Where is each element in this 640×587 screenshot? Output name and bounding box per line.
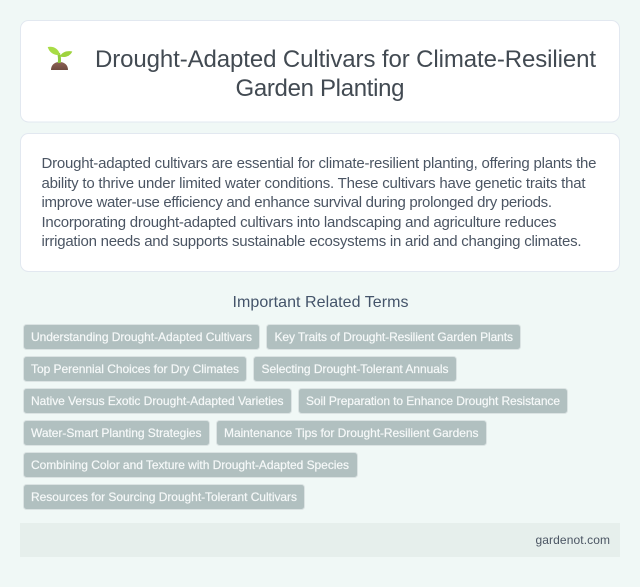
- header panel: [20, 20, 620, 122]
- tag: water-smart: Water-Smart Planting Strategies: [31, 426, 202, 440]
- title: [95, 46, 596, 102]
- icon: seedling: [48, 47, 72, 70]
- description text: [42, 155, 596, 250]
- tag: annuals: [254, 356, 456, 382]
- tag: native versus exotic: [24, 388, 292, 414]
- tag: understanding: [24, 324, 260, 350]
- tag: perennial choices: Top Perennial Choices for Dry Climates: [31, 362, 239, 376]
- tag: annuals: Selecting Drought-Tolerant Annuals: [262, 362, 448, 376]
- tag: native versus exotic: Native Versus Exotic Drought-Adapted Varieties: [31, 394, 284, 408]
- title: Garden Planting: [236, 75, 404, 102]
- tag: color and texture: [24, 452, 358, 478]
- related terms tags: [24, 324, 568, 510]
- tag: understanding: Understanding Drought-Adapted Cultivars: [31, 330, 252, 344]
- description text: ability to thrive under limited water conditions. These cultivars have genetic traits that: [42, 175, 586, 192]
- tag: water-smart: [24, 420, 210, 446]
- description text: Incorporating drought-adapted cultivars into landscaping and agriculture reduces: [42, 214, 556, 231]
- tag: resources: Resources for Sourcing Drought-Tolerant Cultivars: [31, 490, 297, 504]
- title: Drought-Adapted Cultivars for Climate-Resilient: [95, 46, 596, 73]
- description text: improve water-use efficiency and enhance survival during prolonged dry periods.: [42, 194, 552, 211]
- description text: irrigation needs and supports sustainable ecosystems in arid and changing climates.: [42, 233, 582, 250]
- tag: maintenance: [216, 420, 486, 446]
- tag: soil preparation: Soil Preparation to Enhance Drought Resistance: [306, 394, 560, 408]
- tag: key traits: Key Traits of Drought-Resilient Garden Plants: [274, 330, 513, 344]
- description text: Drought-adapted cultivars are essential for climate-resilient planting, offering plants the: [42, 155, 596, 172]
- footer: [20, 523, 620, 557]
- tag: maintenance: Maintenance Tips for Drought-Resilient Gardens: [224, 426, 478, 440]
- footer source text: gardenot.com: [536, 533, 610, 547]
- tag: resources: [24, 484, 304, 510]
- tag: key traits: [266, 324, 520, 350]
- tag: color and texture: Combining Color and Texture with Drought-Adapted Species: [31, 458, 349, 472]
- tag: soil preparation: [298, 388, 568, 414]
- description panel: [20, 134, 620, 272]
- tag: perennial choices: [24, 356, 246, 382]
- heading: important related terms: Important Related Terms: [232, 294, 408, 311]
